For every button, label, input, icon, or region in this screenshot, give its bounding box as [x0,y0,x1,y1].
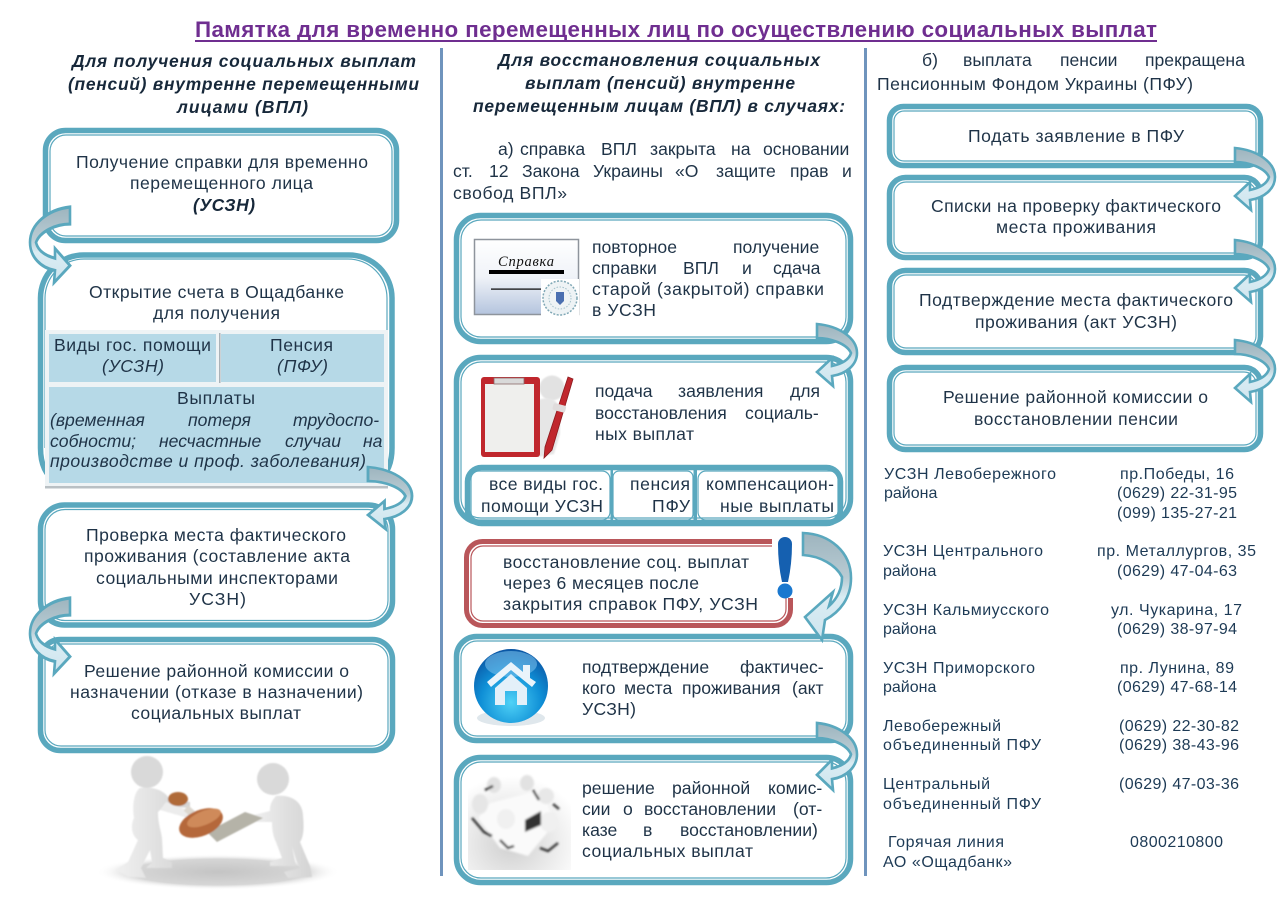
table: виды выплат: (временная [50,410,145,430]
text block: case a: ВПЛ [601,139,637,159]
icon: meeting at table [468,775,571,870]
box: открытие счета: для получения [153,303,280,323]
heading: right column: Пенсионным Фондом Украины (ПФУ) [877,74,1193,94]
box: решение комиссии о восстановлении: в [643,820,652,840]
box: подтверждение места: проживания (акт УСЗН) [975,312,1177,332]
box: подтверждение места проживания: кого [582,678,616,698]
contact: Центральный ПФУ: (0629) 47-03-36 [1119,776,1239,793]
heading: right column [877,50,1245,94]
contact: УСЗН Кальмиусского [883,602,1242,638]
contact: УСЗН Левобережного: пр.Победы, 16 [1120,466,1234,483]
contact: горячая линия: Горячая линия [888,834,1004,851]
box: повторное получение справки: повторное [592,237,677,257]
box: подтверждение места: Подтверждение места фактического [919,290,1233,310]
arrow: счет to проверка [368,467,412,529]
sub-boxes: виды выплат: пенсия [630,474,690,494]
table: виды выплат: случаи [285,431,341,451]
box: повторное получение справки: сдача [773,258,821,278]
contact: УСЗН Приморского: района [883,679,936,696]
contact: Левобережный ПФУ: объединенный ПФУ [883,737,1042,754]
contact: УСЗН Приморского: (0629) 47-68-14 [1117,679,1237,696]
box: повторное получение справки: ВПЛ [683,258,719,278]
box: повторное получение справки: получение [733,237,819,257]
callout: red box about 6 months [466,537,798,626]
box: подтверждение места проживания [456,636,850,740]
contact: Центральный ПФУ [883,776,1239,813]
box: повторное получение справки: старой (закрытой) справки [592,279,824,299]
table: виды выплат: потеря [188,410,251,430]
heading: middle column: Для восстановления социальных [496,50,821,70]
table: виды выплат: собности; [50,431,136,451]
box: подача заявления: заявления [678,381,763,401]
box: решение районной комиссии: Решение районной комиссии о [84,661,349,681]
text block: case a: основании [763,139,849,159]
box: решение комиссии о восстановлении: социальных выплат [582,841,753,861]
contact: УСЗН Кальмиусского: района [883,621,936,638]
table: виды выплат: на [363,431,383,451]
illustration: two figures with stamp [96,756,340,890]
contact: УСЗН Приморского: пр. Лунина, 89 [1120,660,1234,677]
box: повторное получение справки [456,216,850,342]
box: проверка места проживания: Проверка места фактического [86,525,346,545]
box: решение комиссии о восстановлении: о [623,799,633,819]
heading: left column: (пенсий) внутренне перемещенными [68,74,419,94]
contact: УСЗН Приморского: УСЗН Приморского [883,660,1035,677]
sub-boxes: виды выплат [468,468,840,524]
text block: case a: «О [675,161,698,181]
box: списки на проверку: места проживания [996,217,1156,237]
heading: middle column: перемещенным лицам (ВПЛ) в случаях: [473,96,845,116]
icon: house in blue circle [474,649,548,726]
box: списки на проверку [890,178,1260,258]
contact: УСЗН Центрального: района [883,563,936,580]
box: подача заявления [456,358,850,524]
contact: УСЗН Центрального: пр. Металлургов, 35 [1097,543,1256,560]
icon: clipboard with figure and pen [481,376,573,458]
box: подать заявление [890,106,1260,166]
box: решение о восстановлении пенсии: Решение районной комиссии о [943,387,1208,407]
sub-boxes: виды выплат: компенсацион- [706,474,834,494]
box: решение комиссии о восстановлении: (от- [793,799,822,819]
box: решение комиссии о восстановлении: районной [672,778,750,798]
table: виды выплат [45,330,388,488]
contact: горячая линия: АО «Ощадбанк» [883,854,1012,871]
box: подтверждение места проживания: подтверждение [582,657,709,677]
box: решение комиссии о восстановлении: решение [582,778,655,798]
callout: red box about 6 months: через 6 месяцев после [503,573,699,593]
box: подача заявления: для [790,381,820,401]
table: виды выплат: (ПФУ) [277,356,328,376]
box: списки на проверку: Списки на проверку фактического [931,196,1221,216]
box: решение районной комиссии [40,640,392,750]
panel: middle column [453,50,857,882]
box: проверка места проживания: УСЗН) [189,589,246,609]
column divider: left [440,48,443,876]
contact: УСЗН Центрального: (0629) 47-04-63 [1117,563,1237,580]
box: решение комиссии о восстановлении: сии [582,799,610,819]
heading: middle column [473,50,845,116]
contact: УСЗН Центрального [883,543,1256,580]
icon: certificate document: Справка [498,254,554,270]
box: получение справки: перемещенного лица [130,173,313,193]
box: решение комиссии о восстановлении: казе [582,820,617,840]
contact: горячая линия [883,834,1223,871]
box: подача заявления: социаль- [745,403,819,423]
text block: case a: на [731,139,751,159]
text block: case a: 12 [489,161,509,181]
panel: right column [877,50,1275,871]
table: виды выплат: производстве и проф. заболевания) [50,451,366,471]
box: подтверждение места [890,270,1260,352]
contact: УСЗН Левобережного: района [884,485,937,502]
box: решение о восстановлении пенсии [890,368,1260,450]
contact: Левобережный ПФУ: (0629) 38-43-96 [1119,737,1239,754]
arrow: right 3 [1235,340,1275,402]
contact: УСЗН Левобережного: УСЗН Левобережного [884,466,1056,483]
box: подтверждение места проживания: УСЗН) [582,699,636,719]
sub-boxes: виды выплат: ные выплаты [720,496,834,516]
arrow: проверка to решение [30,598,70,674]
box: открытие счета [40,255,392,488]
title: Памятка для временно перемещенных лиц по осуществлению социальных выплат [195,17,1157,42]
box: решение комиссии о восстановлении [456,758,850,882]
box: повторное получение справки: справки [592,258,657,278]
table: виды выплат: Виды гос. помощи [54,335,211,355]
arrow: right 2 [1235,240,1275,302]
heading: right column: б) [922,50,938,70]
box: подача заявления: ных выплат [595,424,694,444]
contact: УСЗН Левобережного [884,466,1237,522]
box: проверка места проживания: социальными инспекторами [96,568,338,588]
sub-boxes: виды выплат: помощи УСЗН [481,496,603,516]
contact: Левобережный ПФУ: Левобережный [883,718,1001,735]
text block: case a: прав [790,161,828,181]
sub-boxes: виды выплат: ПФУ [652,496,691,516]
box: подача заявления: подача [595,381,653,401]
box: подтверждение места проживания: (акт [792,678,824,698]
box: решение комиссии о восстановлении: комис- [768,778,822,798]
box: решение комиссии о восстановлении: восстановлении [644,799,776,819]
table: виды выплат: Пенсия [270,335,333,355]
contact: УСЗН Кальмиусского: ул. Чукарина, 17 [1111,602,1242,619]
heading: right column: пенсии [1060,50,1117,70]
box: решение районной комиссии: назначении (отказе в назначении) [70,682,363,702]
heading: middle column: выплат (пенсий) внутренне [525,73,795,93]
contacts list [883,466,1256,871]
text block: case a: Закона [522,161,580,181]
callout: red box about 6 months: восстановление соц. выплат [503,552,749,572]
sub-boxes: виды выплат: все виды гос. [489,474,603,494]
box: получение справки [46,130,396,240]
box: проверка места проживания: проживания (составление акта [84,546,350,566]
box: подтверждение места проживания: фактичес- [740,657,824,677]
text block: case a: справка [520,139,585,159]
table: виды выплат: трудоспо- [293,410,379,430]
icon: certificate document [474,240,579,316]
box: подтверждение места проживания: проживания [682,678,781,698]
box: повторное получение справки: и [742,258,752,278]
box: подтверждение места проживания: места [624,678,673,698]
column divider: right [864,48,867,876]
text block: case a [453,139,852,203]
heading: left column: Для получения социальных выплат [70,51,416,71]
box: решение районной комиссии: социальных выплат [131,703,301,723]
box: решение о восстановлении пенсии: восстановлении пенсии [974,409,1178,429]
table: виды выплат: (УСЗН) [102,356,164,376]
icon: exclamation mark [778,537,792,598]
contact: УСЗН Приморского [883,660,1237,696]
table: виды выплат: несчастные [159,431,261,451]
contact: Центральный ПФУ: Центральный [883,776,990,793]
heading: right column: выплата [963,50,1032,70]
heading: left column [68,51,419,117]
box: открытие счета: Открытие счета в Ощадбанке [89,282,344,302]
box: получение справки: Получение справки для временно [76,152,368,172]
contact: УСЗН Кальмиусского: УСЗН Кальмиусского [883,602,1049,619]
contact: горячая линия: 0800210800 [1130,834,1223,851]
panel: left column [30,51,419,890]
contact: Левобережный ПФУ [883,718,1239,754]
heading: right column: прекращена [1145,50,1245,70]
contact: УСЗН Кальмиусского: (0629) 38-97-94 [1117,621,1237,638]
table: виды выплат: Выплаты [177,388,255,408]
arrow: подтверждение to решение [817,723,857,790]
box: подача заявления: восстановления [595,403,727,423]
text block: case a: и [842,161,852,181]
text block: case a: закрыта [650,139,716,159]
text block: case a: защите [716,161,776,181]
arrow: справка to заявление [817,324,857,386]
arrow: right 1 [1235,148,1275,210]
callout: red box about 6 months: закрытия справок ПФУ, УСЗН [503,594,758,614]
box: повторное получение справки: в УСЗН [592,300,656,320]
text block: case a: свобод ВПЛ» [453,183,567,203]
text block: case a: Украины [593,161,663,181]
box: проверка места проживания [40,505,392,625]
arrow: callout to подтверждение [803,533,851,640]
contact: УСЗН Левобережного: (099) 135-27-21 [1117,505,1237,522]
box: подать заявление: Подать заявление в ПФУ [968,126,1185,146]
contact: УСЗН Левобережного: (0629) 22-31-95 [1117,485,1237,502]
arrow: справка to счет [30,207,70,283]
contact: Левобережный ПФУ: (0629) 22-30-82 [1119,718,1239,735]
heading: left column: лицами (ВПЛ) [176,97,308,117]
box: решение комиссии о восстановлении: восстановлении) [680,820,818,840]
text block: case a: ст. [453,161,473,181]
contact: Центральный ПФУ: объединенный ПФУ [883,796,1042,813]
box: получение справки: (УСЗН) [193,195,255,215]
text block: case a: а) [498,139,514,159]
contact: УСЗН Центрального: УСЗН Центрального [883,543,1043,560]
